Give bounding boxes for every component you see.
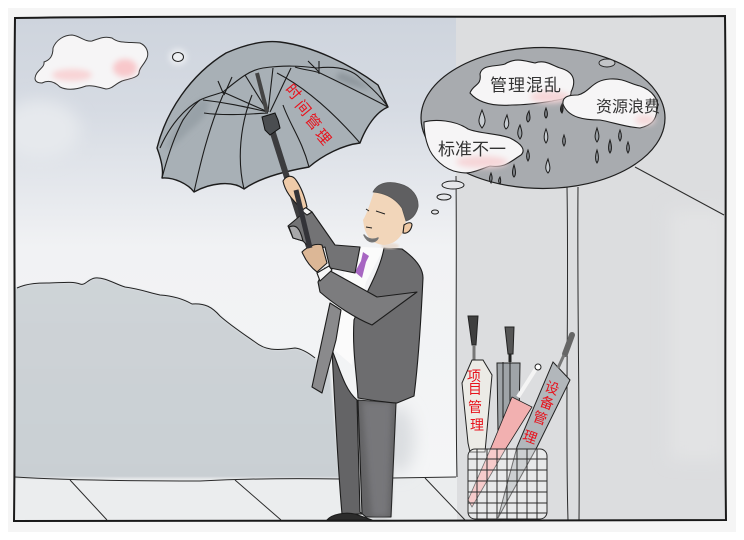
thought cloud — [421, 48, 665, 188]
cloud: 资源浪费 — [563, 79, 658, 128]
cloud labels — [438, 76, 660, 159]
pink umbrella — [468, 364, 541, 507]
equipment label: 理 — [521, 427, 539, 447]
project label: 目 — [468, 381, 482, 397]
equipment label: 设 — [543, 378, 561, 398]
project label — [467, 368, 484, 433]
sleeve front arm — [318, 268, 417, 325]
trousers — [332, 350, 396, 517]
umbrella label: 间 — [291, 97, 314, 120]
ear — [403, 223, 412, 233]
project label: 项 — [467, 368, 481, 384]
ground and wall lines — [15, 167, 724, 520]
cloud: 管理混乱 — [470, 60, 574, 105]
umbrella label: 管 — [301, 111, 324, 134]
equipment label — [521, 378, 561, 447]
thought bubbles — [432, 181, 464, 214]
wire basket — [468, 449, 547, 519]
shaft and handle — [257, 73, 267, 112]
cuff front arm — [317, 266, 332, 281]
shoe — [327, 513, 372, 520]
sleeve raised arm — [288, 210, 360, 273]
face — [363, 192, 406, 245]
neck shade — [381, 243, 399, 249]
man — [283, 176, 423, 520]
tie — [355, 252, 369, 278]
hill — [10, 278, 340, 478]
cloud: 标准不一 — [424, 120, 523, 173]
cloud labels: 标准不一 — [438, 140, 506, 159]
grey umbrella back — [497, 327, 520, 432]
equipment label: 备 — [538, 393, 556, 413]
cuff raised arm — [302, 207, 312, 215]
raindrops — [479, 104, 630, 184]
cloud labels: 资源浪费 — [596, 98, 660, 116]
ribs — [160, 61, 388, 192]
small bubble — [172, 52, 184, 62]
upper hand — [283, 176, 307, 210]
handle in hand — [296, 190, 310, 248]
cloud labels: 管理混乱 — [490, 76, 562, 95]
shirt — [332, 247, 384, 365]
project label: 理 — [470, 417, 484, 433]
jacket front — [354, 248, 423, 403]
lower hand — [302, 244, 327, 272]
umbrella — [157, 42, 388, 247]
project label: 管 — [468, 399, 482, 415]
equipment label: 管 — [531, 408, 549, 428]
equipment umbrella — [498, 335, 572, 518]
umbrella label: 时 — [281, 81, 304, 104]
small cloud — [35, 35, 148, 89]
canopy — [157, 42, 388, 192]
jacket left flap — [312, 303, 341, 393]
beard — [364, 235, 378, 242]
umbrella label: 理 — [311, 126, 334, 149]
project umbrella — [462, 316, 492, 452]
eyes and mouth — [366, 209, 385, 228]
hair — [373, 183, 418, 221]
umbrella stand — [462, 316, 572, 519]
hill outline — [17, 278, 315, 358]
umbrella label — [281, 81, 334, 149]
